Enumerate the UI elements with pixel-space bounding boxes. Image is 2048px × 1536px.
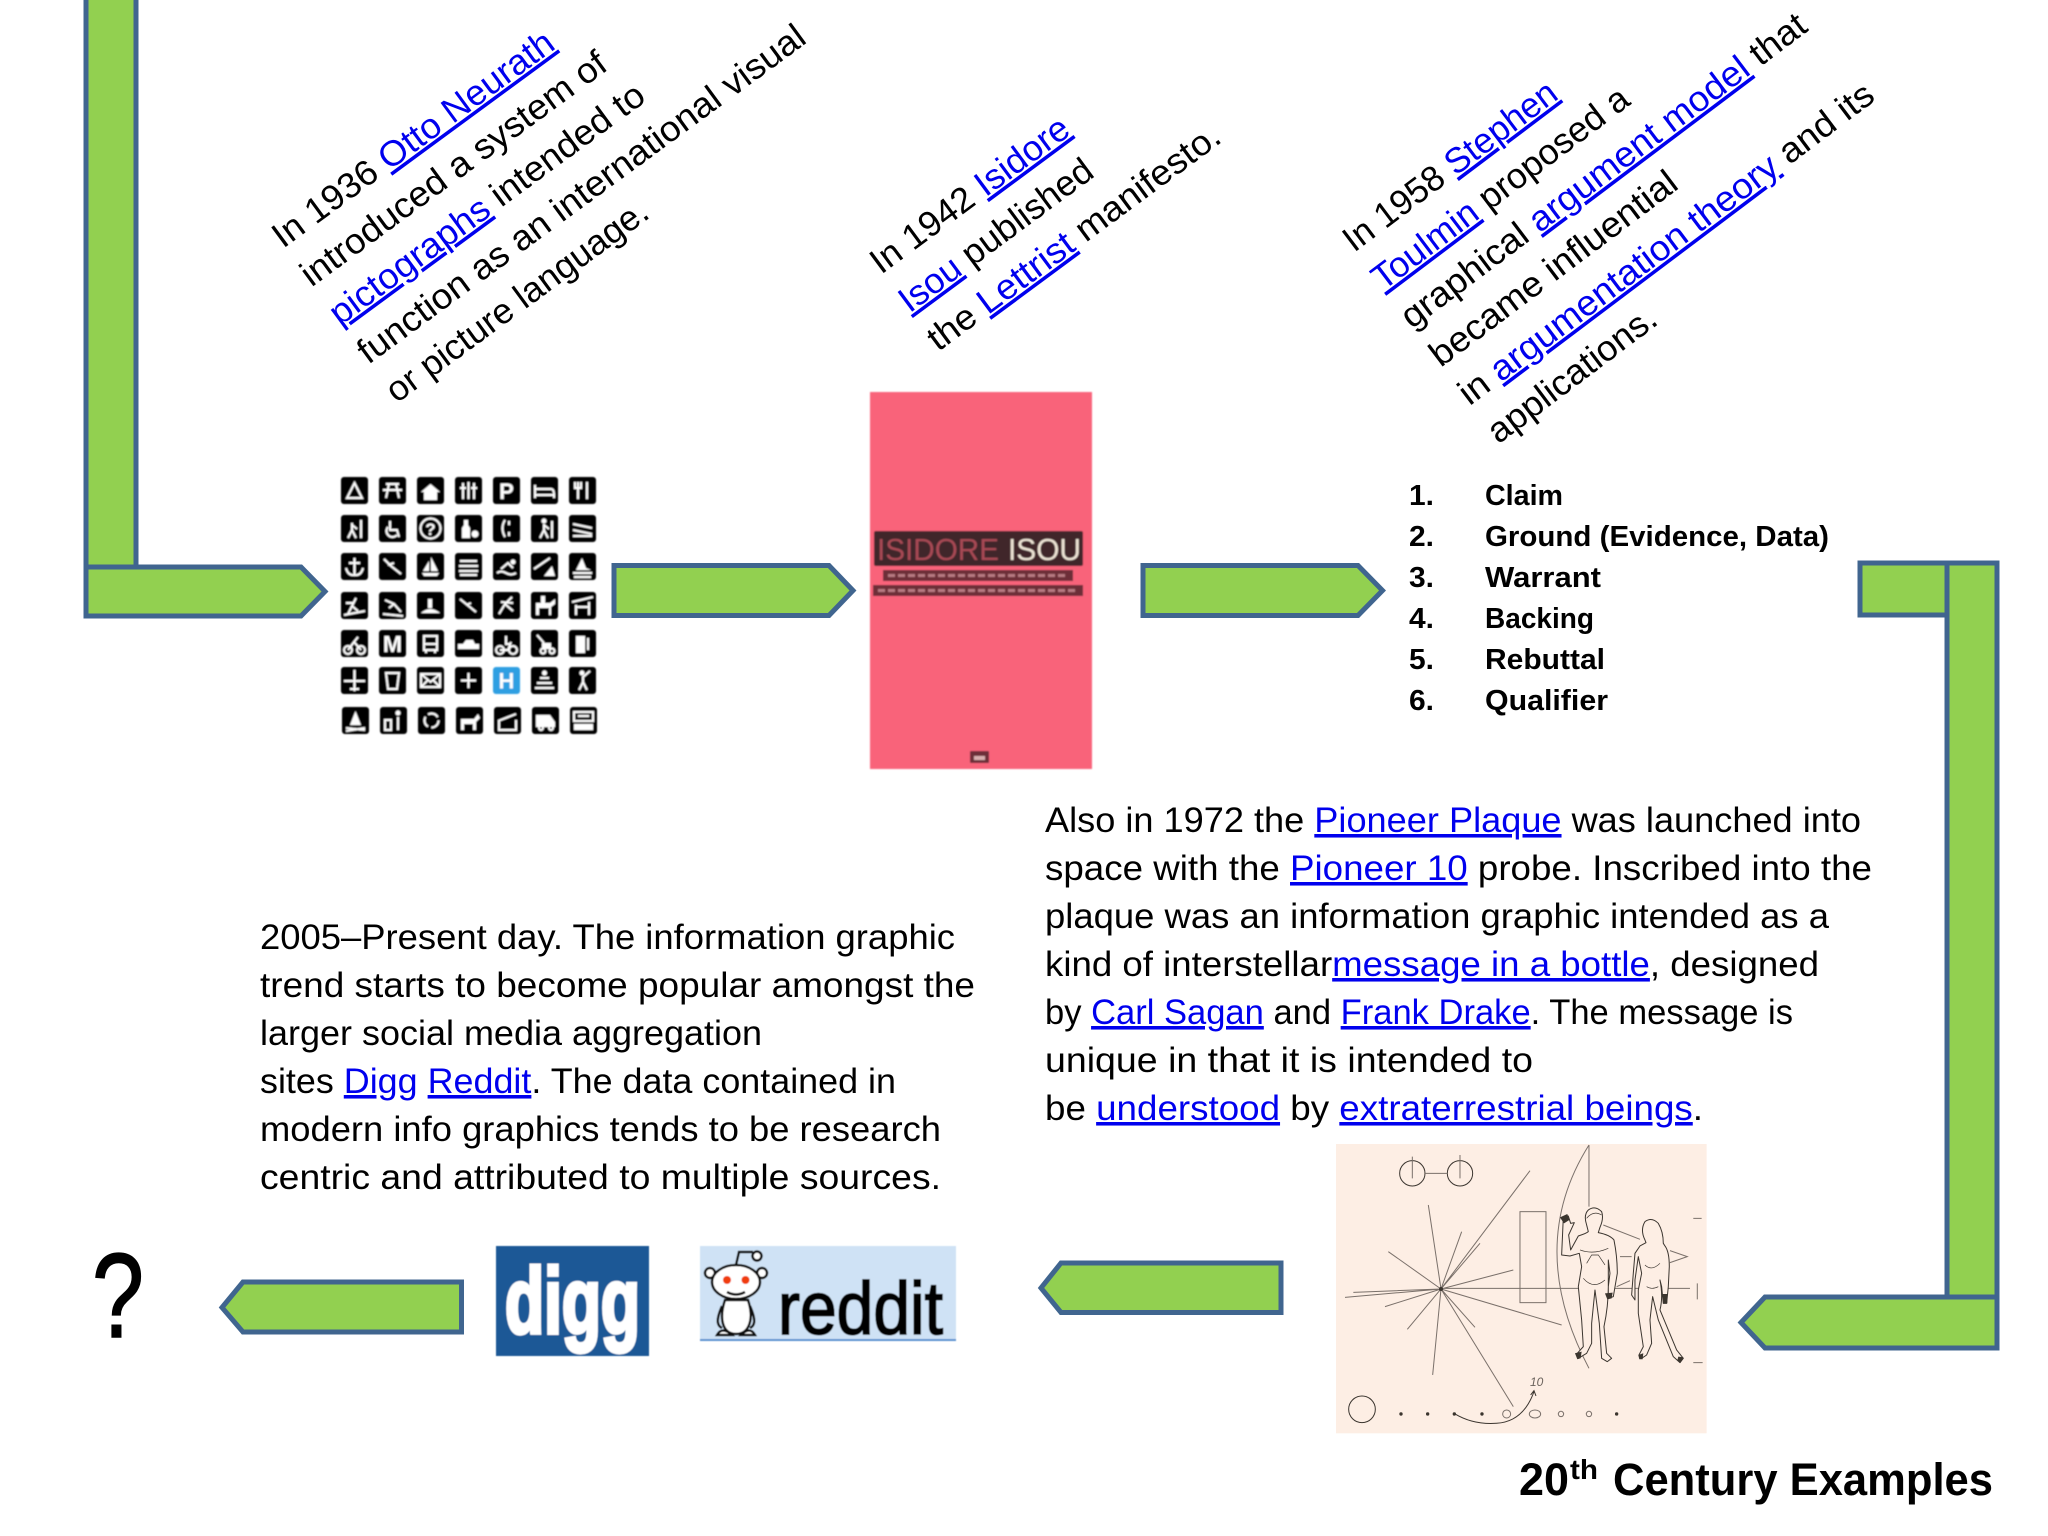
logo: reddit: reddit	[778, 1267, 943, 1350]
heading: 20th Century Examples: 20	[1519, 1454, 1569, 1505]
list: Toulmin argument model: 4.	[1409, 603, 1434, 635]
text block: 2005 to present: centric and attributed to multiple sources.	[260, 1157, 941, 1197]
arrow: logos to question mark	[222, 1282, 462, 1332]
text block: 1972 Pioneer Plaque: plaque was an information graphic intended as a	[1045, 896, 1829, 936]
cover title band: ISIDORE	[877, 532, 999, 567]
list: Toulmin argument model: Rebuttal	[1485, 644, 1605, 676]
logo: digg	[496, 1246, 649, 1356]
text block: 1936 Otto Neurath: pictographs intended to	[321, 74, 652, 333]
list: Toulmin argument model: 2.	[1409, 521, 1434, 553]
text block: 2005 to present: modern info graphics tends to be research	[260, 1109, 941, 1149]
arrow: bent arrow at right side	[1741, 563, 1997, 1348]
text block: 2005 to present: sites Digg Reddit. The data contained in	[260, 1061, 896, 1101]
plaque: spacecraft outline	[1557, 1145, 1703, 1368]
logo: reddit	[700, 1246, 956, 1350]
text block: 2005 to present: larger social media aggregation	[260, 1013, 762, 1053]
text block: 2005 to present: 2005–Present day. The information graphic	[260, 917, 955, 957]
text block: 2005 to present	[260, 917, 975, 1197]
text block: 1936 Otto Neurath: function as an international visual	[349, 16, 813, 372]
text block: 1936 Otto Neurath	[264, 0, 841, 410]
text block: 1958 Stephen Toulmin: became influential	[1421, 162, 1685, 374]
text block: 1972 Pioneer Plaque: by Carl Sagan and Frank Drake. The message is	[1045, 992, 1793, 1032]
image: grid of pictographs: P	[499, 479, 514, 504]
arrow: pictographs to Isou	[614, 566, 853, 616]
text block: 1972 Pioneer Plaque: unique in that it is intended to	[1045, 1040, 1533, 1080]
text block: 1942 Isidore Isou: Isou published	[891, 150, 1101, 320]
plaque: pulsar map	[1345, 1171, 1690, 1407]
cover title band	[874, 531, 1083, 567]
heading: 20th Century Examples: Century Examples	[1613, 1454, 1993, 1505]
plaque: solar system: 10	[1530, 1375, 1544, 1389]
text block: 1972 Pioneer Plaque: be understood by extraterrestrial beings .	[1045, 1088, 1703, 1128]
text block: 1942 Isidore Isou: the Lettrist manifesto.	[919, 115, 1228, 359]
text block: 1958 Stephen Toulmin: applications.	[1479, 298, 1665, 451]
text block: 1958 Stephen Toulmin: in argumentation theory and its	[1450, 74, 1882, 413]
text block: 1936 Otto Neurath: In 1936 Otto Neurath	[264, 22, 562, 255]
list: Toulmin argument model	[1409, 480, 1829, 717]
text block: 1958 Stephen Toulmin: Toulmin proposed a	[1364, 78, 1637, 298]
arrow: Isou to Toulmin	[1143, 566, 1382, 616]
list: Toulmin argument model: Backing	[1485, 603, 1594, 635]
text block: 2005 to present: trend starts to become popular amongst the	[260, 965, 975, 1005]
icon: reddit alien	[705, 1252, 767, 1335]
plaque: human figures	[1560, 1208, 1683, 1363]
text block: 1936 Otto Neurath: or picture language.	[378, 191, 656, 410]
list: Toulmin argument model: Ground (Evidence, Data)	[1485, 521, 1829, 553]
text block: 1972 Pioneer Plaque: space with the Pioneer 10 probe. Inscribed into the	[1045, 848, 1872, 888]
list: Toulmin argument model: Qualifier	[1485, 685, 1608, 717]
text block: 1972 Pioneer Plaque	[1045, 800, 1872, 1128]
text block: 1972 Pioneer Plaque: Also in 1972 the Pioneer Plaque was launched into	[1045, 800, 1861, 840]
text block: 1942 Isidore Isou: In 1942 Isidore	[862, 108, 1077, 281]
text block: 1972 Pioneer Plaque: kind of interstellar message in a bottle , designed	[1045, 944, 1819, 984]
logo: digg: digg	[505, 1249, 640, 1353]
text block: 1958 Stephen Toulmin: In 1958 Stephen	[1335, 72, 1565, 259]
image: grid of pictographs: ?	[425, 520, 436, 539]
image: Isidore Isou book cover	[870, 392, 1092, 769]
text block: 1936 Otto Neurath: introduced a system of	[292, 43, 614, 294]
text block: 1958 Stephen Toulmin	[1335, 0, 1911, 451]
list: Toulmin argument model: Warrant	[1485, 562, 1602, 594]
question mark: ?	[92, 1229, 144, 1363]
list: Toulmin argument model: 3.	[1409, 562, 1434, 594]
plaque: solar system	[1349, 1375, 1618, 1424]
image: Pioneer plaque	[1336, 1144, 1707, 1433]
list: Toulmin argument model: 6.	[1409, 685, 1434, 717]
image: grid of pictographs	[341, 477, 597, 734]
text block: 1942 Isidore Isou	[862, 38, 1228, 359]
plaque: hydrogen circles	[1400, 1155, 1473, 1186]
arrow: plaque to social logos	[1041, 1263, 1281, 1312]
image: grid of pictographs: M	[383, 631, 402, 657]
heading: 20th Century Examples: th	[1570, 1454, 1598, 1485]
list: Toulmin argument model: 5.	[1409, 644, 1434, 676]
image: grid of pictographs: H	[499, 668, 514, 694]
cover title band: ISOU	[1008, 532, 1081, 567]
arrow: bent arrow from top left	[86, 0, 325, 616]
list: Toulmin argument model: 1.	[1409, 480, 1434, 512]
list: Toulmin argument model: Claim	[1485, 480, 1563, 512]
text block: 1958 Stephen Toulmin: graphical argument model that	[1393, 4, 1814, 336]
